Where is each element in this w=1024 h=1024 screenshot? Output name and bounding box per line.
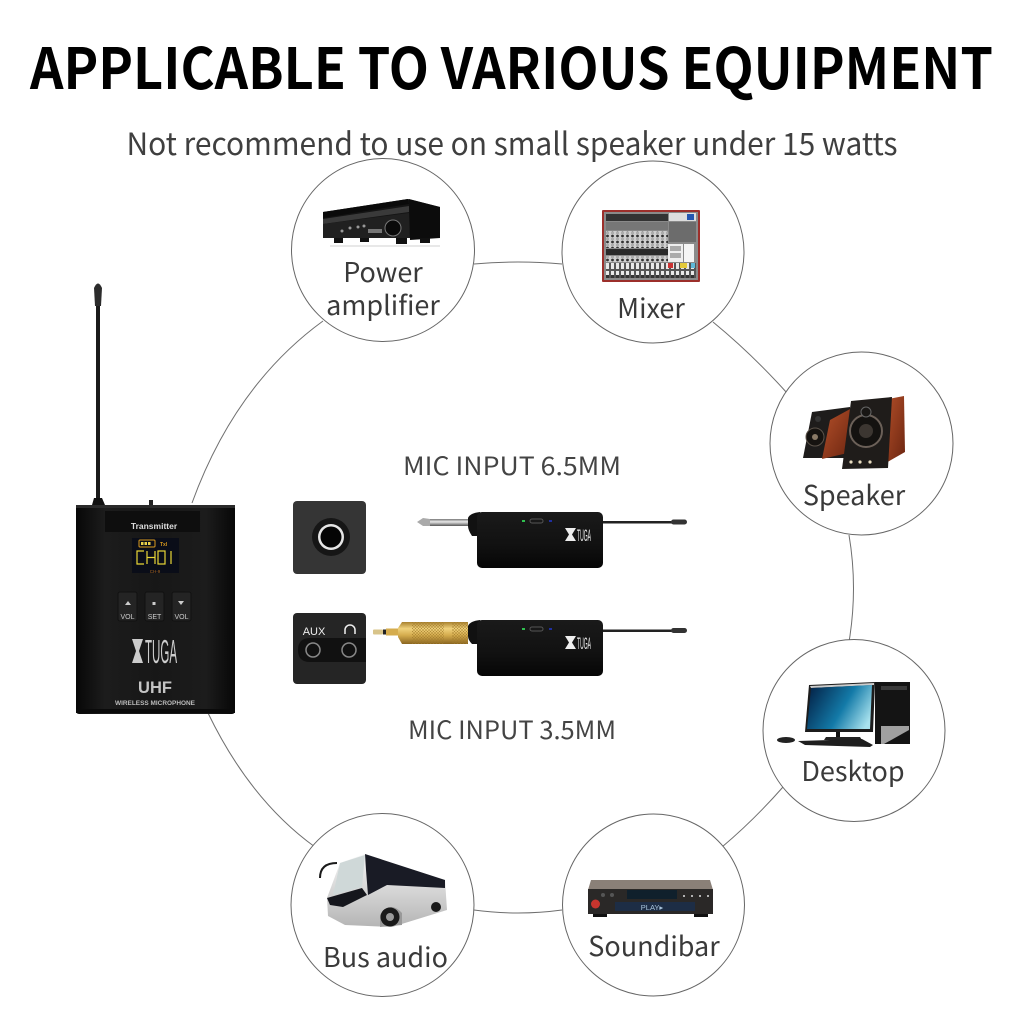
tile: AUX ports: [293, 613, 366, 684]
icon: soundbar player: [588, 880, 713, 917]
display: CH-9: [150, 569, 161, 574]
receiver with 6.5mm plug: TUGA: [577, 526, 591, 545]
panel: transmitter: TUGA: [145, 633, 177, 670]
label: UHF: UHF: [138, 679, 172, 697]
tile: AUX ports: AUX: [303, 626, 326, 638]
panel: transmitter: [76, 284, 235, 714]
heading: mic input 3.5mm: MIC INPUT 3.5MM: [408, 711, 616, 747]
subtitle: Not recommend to use on small speaker under 15 watts: [126, 119, 898, 164]
label: Transmitter: Transmitter: [131, 521, 178, 531]
icon: desktop computer: [777, 682, 910, 747]
buttons: [118, 592, 191, 621]
receiver with 6.5mm plug: [417, 512, 687, 568]
label: Soundibar: Soundibar: [588, 925, 720, 964]
buttons: VOL: [120, 614, 135, 621]
label: Desktop: Desktop: [801, 750, 905, 789]
label: Mixer: Mixer: [617, 287, 685, 326]
panel: desktop: [763, 640, 945, 822]
display: Txl: [160, 542, 168, 548]
heading: mic input 6.5mm: MIC INPUT 6.5MM: [403, 447, 621, 483]
receiver with 3.5mm gold adapter: TUGA: [577, 634, 591, 653]
logo: XTUGA: [132, 633, 177, 670]
label: Speaker: Speaker: [803, 474, 906, 513]
transmitter body: [76, 505, 235, 714]
buttons: VOL: [174, 614, 189, 621]
label: Bus audio: Bus audio: [323, 936, 448, 975]
panel: soundbar: [562, 814, 744, 996]
label: Power: Power: [343, 251, 423, 290]
label: wireless microphone: WIRELESS MICROPHONE: [115, 701, 195, 707]
display: [132, 538, 179, 574]
panel: speaker: [770, 352, 953, 535]
icon: mixer: [602, 210, 700, 282]
tile: 6.5mm jack: [293, 501, 366, 574]
label: amplifier: amplifier: [326, 284, 440, 323]
antenna: [92, 284, 105, 505]
icon: bus: [320, 854, 447, 927]
connecting ring: [192, 262, 854, 913]
panel: power amplifier: [292, 158, 474, 342]
icon: speakers: [803, 396, 905, 469]
panel: bus audio: [291, 814, 474, 996]
panel: mixer: [562, 161, 744, 343]
buttons: SET: [148, 614, 162, 621]
icon: amplifier: [323, 199, 440, 247]
receiver with 3.5mm gold adapter: [373, 620, 687, 676]
icon: soundbar player: PLAY▸: [641, 903, 663, 912]
